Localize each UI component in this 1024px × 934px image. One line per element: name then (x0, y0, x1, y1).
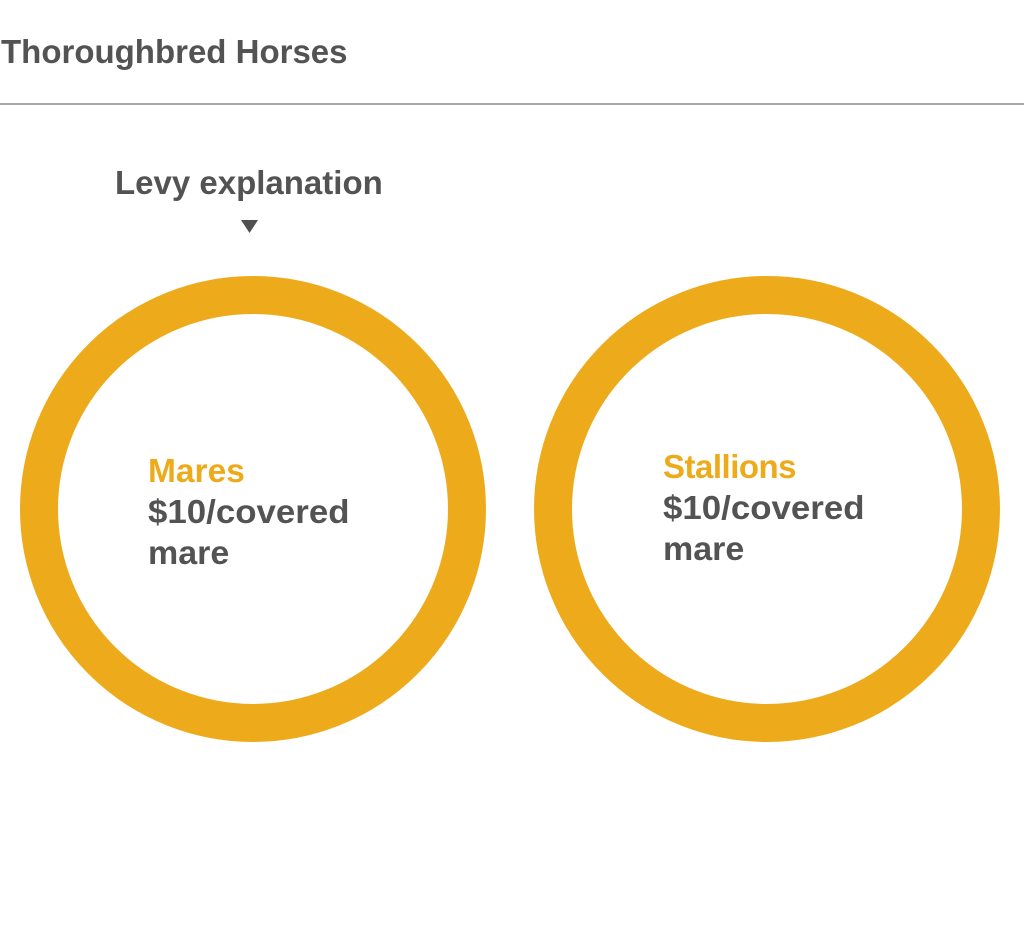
circle: stallions (534, 276, 1000, 742)
icon: down arrow (241, 220, 258, 233)
text: mares levy: $10/covered (148, 493, 349, 530)
circle: mares (20, 276, 486, 742)
text: mares levy: Mares (148, 452, 245, 489)
text: mares levy (148, 452, 349, 571)
title: Thoroughbred Horses (1, 33, 348, 70)
text: stallions levy: $10/covered (663, 489, 864, 526)
text: stallions levy: Stallions (663, 448, 796, 485)
text: mares levy: mare (148, 534, 229, 571)
heading: levy explanation: Levy explanation (115, 164, 383, 201)
text: stallions levy: mare (663, 530, 744, 567)
text: stallions levy (663, 448, 864, 567)
